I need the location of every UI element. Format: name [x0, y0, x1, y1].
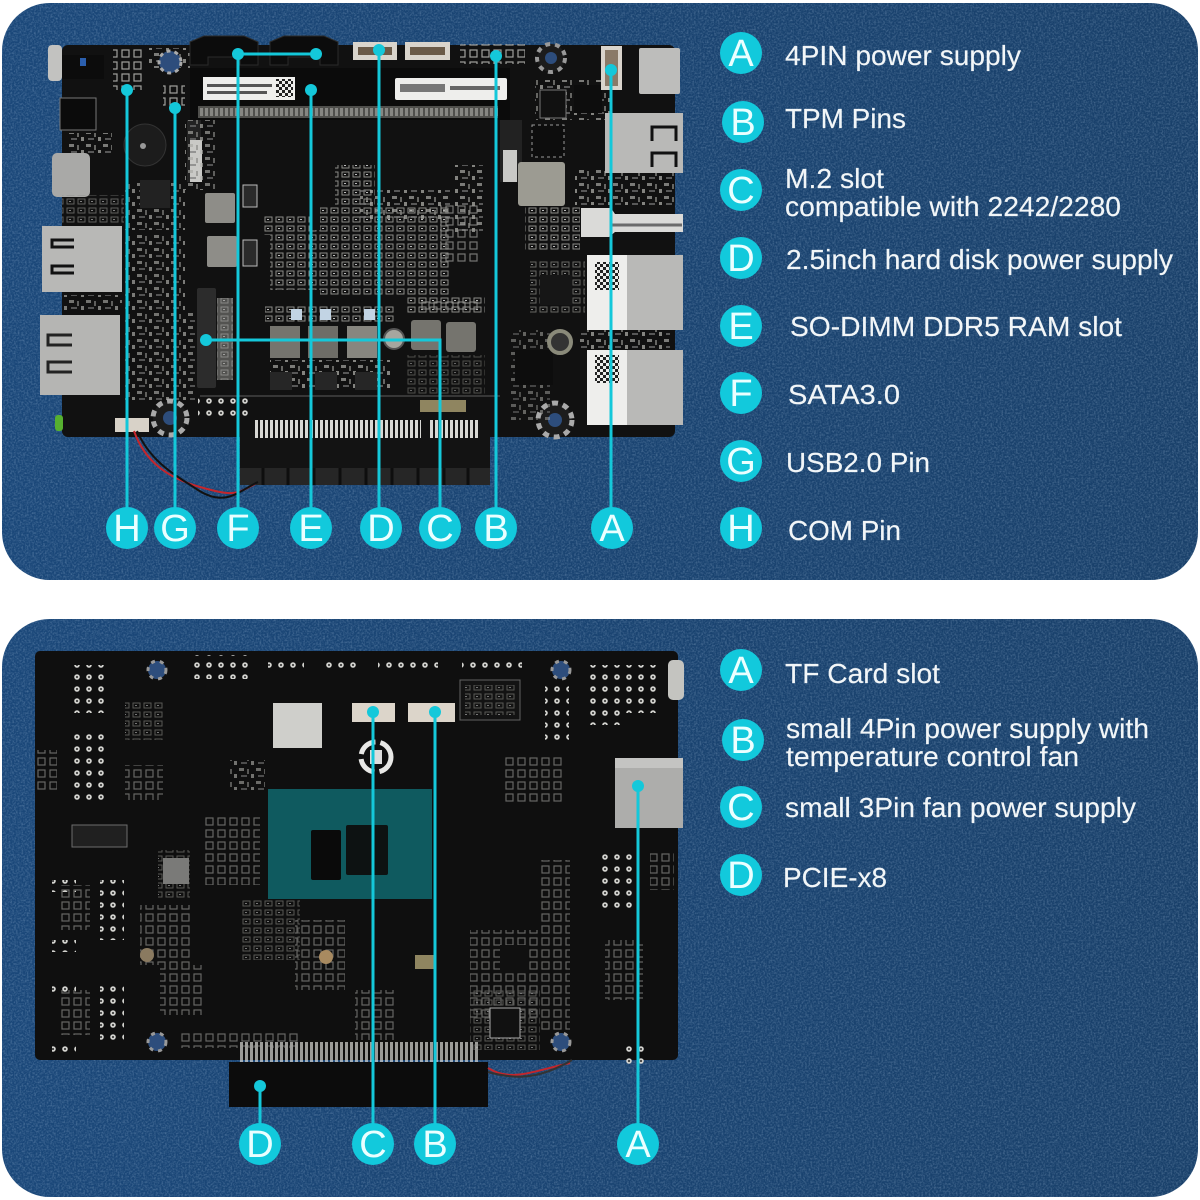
edge connector pins — [240, 1042, 478, 1062]
legend item D: D — [727, 855, 755, 897]
legend: underside — [720, 649, 1149, 897]
leader lines and callouts on underside — [239, 706, 659, 1166]
legend item B — [722, 713, 1149, 772]
right side chips — [535, 80, 610, 120]
rotation icon — [361, 742, 391, 772]
callout H — [106, 507, 148, 550]
callout D — [239, 1123, 281, 1166]
through-hole dots — [52, 655, 661, 1064]
legend item C: compatible with 2242/2280 — [785, 191, 1121, 222]
legend item E: SO-DIMM DDR5 RAM slot — [790, 311, 1122, 342]
fan connectors — [352, 703, 455, 722]
panel: top board overview — [2, 3, 1198, 580]
legend item D — [720, 237, 1173, 280]
callout E: E — [298, 508, 324, 550]
legend item D: PCIE-x8 — [783, 862, 887, 893]
left ports — [40, 153, 122, 395]
callout A: A — [625, 1124, 651, 1166]
callout C: C — [426, 508, 454, 550]
legend item E — [720, 305, 1122, 348]
callout D — [360, 507, 402, 550]
legend item B: TPM Pins — [785, 103, 906, 134]
legend item F: F — [729, 373, 753, 415]
callout D: D — [246, 1124, 274, 1166]
callout A — [591, 507, 633, 550]
SATA connectors — [190, 36, 338, 65]
leader lines and callouts on top board — [106, 44, 633, 550]
legend item D: 2.5inch hard disk power supply — [786, 244, 1173, 275]
legend item A: 4PIN power supply — [785, 40, 1021, 71]
callout G — [154, 507, 196, 550]
panel: bottom board overview — [2, 619, 1198, 1197]
legend item C — [720, 786, 1136, 829]
inductors — [205, 162, 565, 358]
legend item H — [720, 507, 901, 550]
callout B — [414, 1123, 456, 1166]
legend item C: M.2 slot — [785, 163, 884, 194]
legend item G — [720, 440, 930, 483]
legend item H: H — [727, 508, 755, 550]
callout C — [419, 507, 461, 550]
legend item A: TF Card slot — [785, 658, 940, 689]
callout F — [217, 507, 259, 550]
legend item F: SATA3.0 — [788, 379, 900, 410]
legend: top board — [720, 32, 1173, 550]
callout C — [352, 1123, 394, 1166]
callout A: A — [599, 508, 625, 550]
callout B — [475, 507, 517, 550]
legend item C — [720, 163, 1121, 222]
callout D: D — [367, 508, 395, 550]
legend item C: small 3Pin fan power supply — [785, 792, 1136, 823]
legend item C: C — [727, 787, 755, 829]
legend item B: B — [730, 102, 756, 144]
motherboard top view — [40, 36, 683, 498]
motherboard underside view — [35, 651, 684, 1107]
callout H: H — [113, 508, 141, 550]
legend item D — [720, 854, 887, 897]
central components cluster — [320, 165, 485, 315]
callout A — [617, 1123, 659, 1166]
component clusters — [37, 680, 674, 1050]
callout E — [290, 507, 332, 550]
edge pins — [253, 420, 421, 438]
legend item G: G — [726, 441, 756, 483]
white shield chip — [273, 703, 322, 748]
legend item B: temperature control fan — [786, 741, 1079, 772]
RAM slot — [190, 68, 510, 120]
legend item H: COM Pin — [788, 515, 901, 546]
processor — [268, 789, 432, 899]
callout G: G — [160, 508, 190, 550]
TF card slot — [615, 758, 683, 828]
M.2 slot — [197, 288, 233, 388]
callout B: B — [483, 508, 509, 550]
legend item B: small 4Pin power supply with — [786, 713, 1149, 744]
legend item E: E — [728, 306, 754, 348]
callout F: F — [226, 508, 250, 550]
legend item A — [720, 32, 1021, 75]
legend item A: A — [728, 33, 754, 75]
legend item B — [722, 101, 906, 144]
legend item C: C — [727, 170, 755, 212]
legend item B: B — [730, 720, 756, 762]
legend item A — [720, 649, 940, 692]
legend item A: A — [728, 650, 754, 692]
right ports — [581, 48, 683, 425]
white 4-pin connector A — [601, 46, 622, 90]
legend item G: USB2.0 Pin — [786, 447, 930, 478]
legend item F — [720, 372, 900, 415]
legend item D: D — [727, 238, 755, 280]
callout C: C — [359, 1124, 387, 1166]
callout B: B — [422, 1124, 448, 1166]
